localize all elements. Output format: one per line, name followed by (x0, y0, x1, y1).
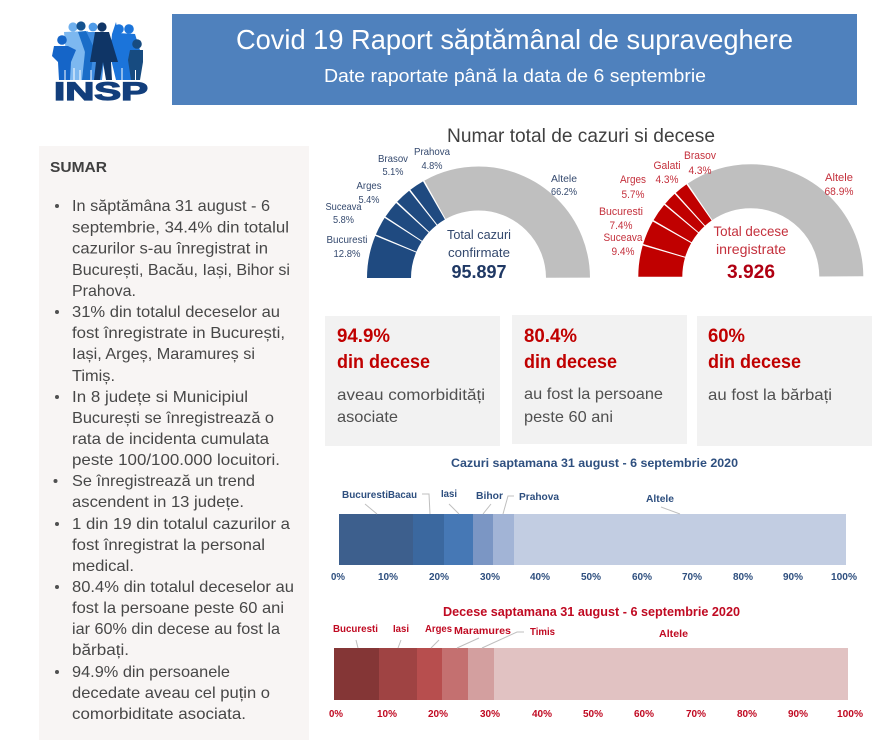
bullet list: In săptămâna 31 august - 6 (72, 198, 270, 215)
bullet list: decedate aveau cel puțin o (72, 685, 270, 702)
deaths labels: 9.4% (612, 246, 635, 258)
bullet list: Iași, Argeș, Maramureș si (72, 346, 255, 363)
bullet list: Timiș. (72, 368, 115, 385)
logo: INSP (52, 21, 148, 106)
cases labels: 5.1% (382, 167, 404, 178)
deaths axis: 80% (737, 709, 757, 720)
deaths bar labels: Iasi (393, 624, 409, 635)
panel: comorbidities stat: 94.9% (337, 326, 390, 347)
panel: comorbidities stat: din decese (337, 352, 430, 373)
cases bar labels: Iasi (441, 489, 457, 500)
deaths labels: Bucuresti (599, 206, 643, 218)
deaths labels: 4.3% (656, 174, 679, 186)
cases axis: 60% (632, 572, 652, 583)
cases labels: Brasov (378, 154, 409, 165)
deaths total: Total decese (714, 223, 789, 239)
deaths total (714, 223, 789, 283)
cases labels (326, 147, 577, 260)
deaths bar labels: Arges (425, 624, 452, 635)
bullet list: cazurilor s-au înregistrat in (72, 240, 268, 258)
deaths bar title: Decese saptamana 31 august - 6 septembrie 2020 (443, 605, 740, 619)
deaths labels (599, 150, 854, 258)
bullet list: București se înregistrează o (72, 410, 274, 427)
cases bar labels: Altele (646, 494, 674, 505)
deaths labels: 68.9% (824, 186, 854, 198)
cases bar labels: Bucuresti (342, 490, 388, 501)
bullet list: medical. (72, 558, 134, 575)
cases labels: Arges (356, 181, 382, 192)
deaths labels: 4.3% (688, 165, 712, 177)
title: Covid 19 Raport săptămânal de supraveghere (236, 24, 793, 55)
deaths labels: 5.7% (622, 189, 645, 201)
cases labels: 66.2% (551, 187, 577, 198)
deaths total: 3.926 (727, 262, 775, 283)
chart: deaths semi-donut (599, 150, 854, 283)
bullet list: 94.9% din persoanele (72, 664, 230, 681)
deaths labels: Arges (620, 174, 647, 186)
deaths axis: 60% (634, 709, 654, 720)
bullet list: Prahova. (72, 283, 136, 300)
section heading: total cases and deaths: Numar total de cazuri si decese (447, 125, 715, 147)
panel: comorbidities stat: aveau comorbidități (337, 387, 485, 404)
deaths labels: Brasov (684, 150, 717, 162)
bullet list: ascendent in 13 județe. (72, 494, 244, 511)
cases total: 95.897 (452, 262, 506, 282)
panel: over 60 stat: au fost la persoane (524, 386, 663, 403)
cases labels: 12.8% (334, 249, 360, 260)
bullet list: Se înregistrează un trend (72, 473, 255, 490)
cases axis: 80% (733, 572, 753, 583)
cases axis: 20% (429, 572, 449, 583)
icon: group of people (52, 21, 143, 80)
cases axis: 50% (581, 572, 601, 583)
cases axis: 40% (530, 572, 550, 583)
cases axis: 70% (682, 572, 702, 583)
cases axis: 90% (783, 572, 803, 583)
deaths axis: 40% (532, 709, 552, 720)
panel: comorbidities stat: asociate (337, 409, 398, 426)
cases bar labels: Prahova (519, 492, 559, 503)
chart: cases semi-donut (326, 147, 577, 282)
summary heading: SUMAR (50, 159, 107, 176)
cases total (447, 228, 511, 282)
cases bar segments (339, 514, 846, 565)
bullet list: 1 din 19 din totalul cazurilor a (72, 516, 290, 533)
deaths axis: 30% (480, 709, 500, 720)
cases axis: 100% (831, 572, 857, 583)
deaths bar labels: Timis (530, 627, 555, 638)
cases labels: Suceava (326, 202, 362, 213)
deaths axis: 90% (788, 709, 808, 720)
header banner (172, 14, 857, 105)
deaths axis (329, 709, 863, 720)
bullet list: peste 100/100.000 locuitori. (72, 452, 280, 469)
deaths bar labels: Maramures (454, 626, 511, 637)
bullet list: fost înregistrat la personal (72, 537, 265, 554)
cases labels: Altele (551, 174, 577, 185)
subtitle: Date raportate până la data de 6 septembrie (324, 66, 706, 86)
cases bar labels: Bacau (388, 490, 417, 501)
cases total: Total cazuri (447, 228, 511, 242)
bullet list: septembrie, 34.4% din totalul (72, 220, 289, 236)
panel: comorbidities stat (325, 316, 500, 446)
bullet list: 80.4% din totalul deceselor au (72, 579, 294, 596)
cases axis (331, 572, 857, 583)
bullet list: iar 60% din decese au fost la (72, 621, 280, 638)
cases axis: 30% (480, 572, 500, 583)
deaths labels: Suceava (604, 232, 642, 244)
deaths axis: 10% (377, 709, 397, 720)
bullet list (54, 198, 294, 723)
bullet list: comorbiditate asociata. (72, 706, 246, 723)
deaths leader lines (356, 632, 524, 648)
panel: men stat: din decese (708, 352, 801, 373)
panel: over 60 stat: din decese (524, 352, 617, 373)
panel: men stat (697, 316, 872, 446)
panel: summary (39, 146, 309, 740)
chart: weekly cases stacked bar (331, 456, 857, 583)
deaths axis: 0% (329, 709, 343, 720)
bullet list: București, Bacău, Iași, Bihor si (72, 262, 290, 279)
bullet list: In 8 județe si Municipiul (72, 389, 248, 406)
cases labels: Prahova (414, 147, 450, 158)
deaths axis: 50% (583, 709, 603, 720)
panel: over 60 stat (512, 315, 687, 444)
cases total: confirmate (448, 246, 510, 260)
cases labels: 5.8% (333, 215, 354, 226)
deaths axis: 20% (428, 709, 448, 720)
bullet list: bărbați. (72, 642, 129, 659)
cases axis: 0% (331, 572, 345, 583)
cases labels: Bucuresti (326, 235, 368, 246)
deaths bar labels: Altele (659, 629, 688, 640)
bullet list: rata de incidenta cumulata (72, 431, 269, 448)
deaths bar labels (333, 624, 688, 640)
panel: over 60 stat: 80.4% (524, 326, 577, 347)
deaths labels: Galati (654, 160, 680, 172)
cases leader lines (365, 494, 680, 514)
deaths axis: 70% (686, 709, 706, 720)
bullet list: fost la persoane peste 60 ani (72, 600, 284, 617)
logo wordmark: INSP (54, 78, 148, 106)
deaths labels: Altele (825, 172, 853, 184)
bullet list: 31% din totalul deceselor au (72, 304, 280, 321)
cases bar labels: Bihor (476, 491, 503, 502)
deaths total: inregistrate (716, 241, 786, 257)
deaths bar labels: Bucuresti (333, 624, 378, 635)
deaths bar segments (334, 648, 848, 700)
cases bar title: Cazuri saptamana 31 august - 6 septembrie 2020 (451, 456, 738, 470)
cases labels: 5.4% (358, 195, 380, 206)
bullet list: fost înregistrate in București, (72, 325, 285, 342)
panel: over 60 stat: peste 60 ani (524, 409, 613, 426)
panel: men stat: au fost la bărbați (708, 387, 832, 404)
cases labels: 4.8% (422, 161, 442, 172)
chart: weekly deaths stacked bar (329, 605, 863, 720)
deaths labels: 7.4% (610, 220, 633, 232)
panel: men stat: 60% (708, 326, 745, 347)
deaths axis: 100% (837, 709, 863, 720)
cases bar labels (342, 489, 674, 505)
cases axis: 10% (378, 572, 398, 583)
